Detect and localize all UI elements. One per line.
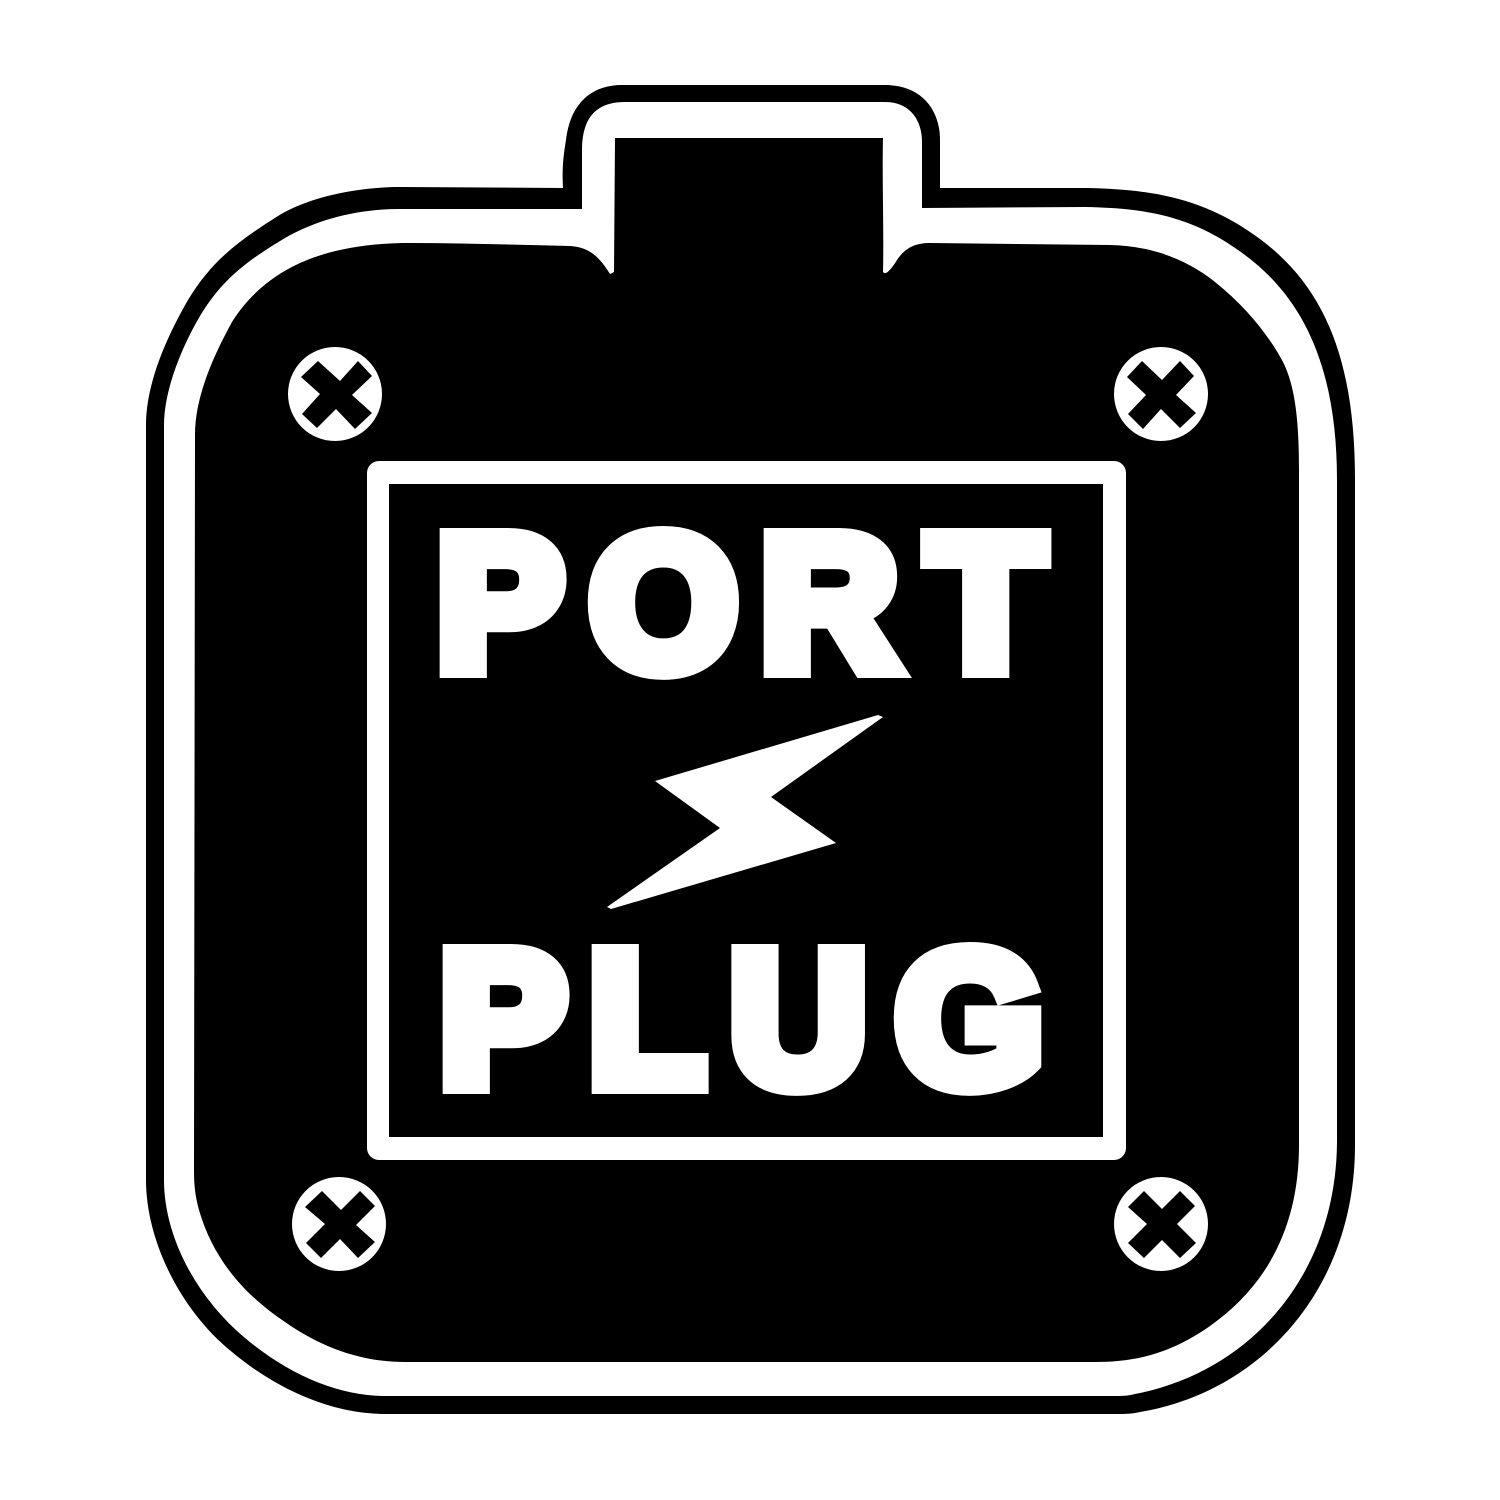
heading: PORT: PORT (437, 498, 1043, 709)
cover black body (194, 138, 1299, 1362)
label panel interior (389, 484, 1103, 1137)
screw: top left (288, 347, 382, 441)
screw: top right (1114, 347, 1208, 441)
cover outer outline (146, 85, 1355, 1414)
screw: bottom right (1114, 1177, 1208, 1271)
screw: bottom left (292, 1177, 386, 1271)
label panel frame (367, 461, 1126, 1160)
icon: lightning bolt (607, 715, 883, 909)
heading: PLUG: PLUG (440, 914, 1043, 1125)
cover white band (164, 102, 1337, 1396)
